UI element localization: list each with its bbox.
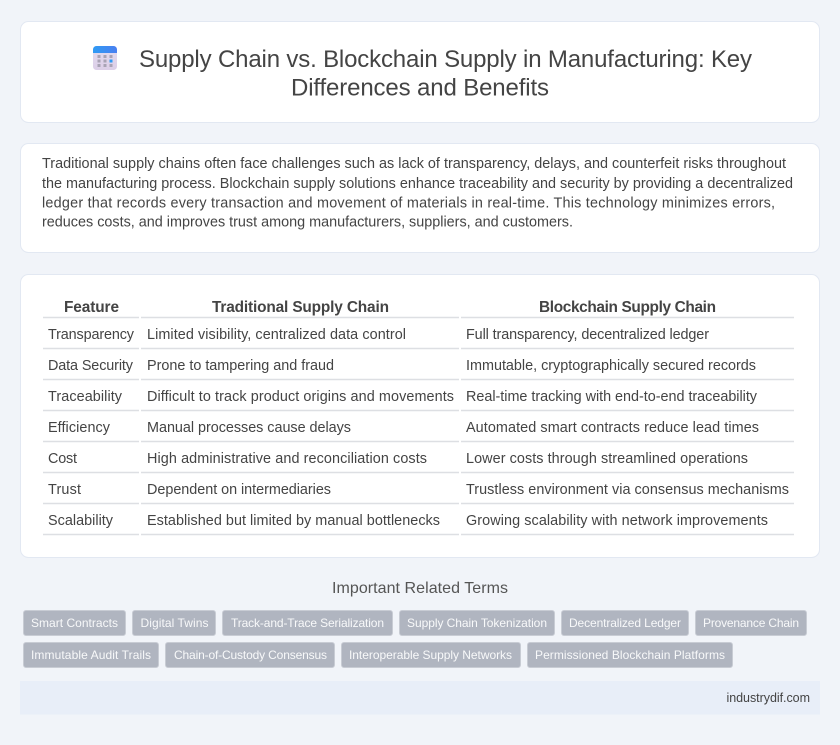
row: efficiency: Automated smart contracts reduce lead times bbox=[466, 420, 759, 436]
tag: Immutable Audit Trails bbox=[31, 648, 151, 662]
tag bbox=[132, 610, 216, 636]
row: traceability: Traceability bbox=[48, 389, 123, 405]
row: scalability: Established but limited by manual bottlenecks bbox=[147, 513, 440, 529]
row: cost: High administrative and reconciliation costs bbox=[147, 451, 427, 467]
tag: Digital Twins bbox=[140, 616, 208, 630]
row: trust: Trust bbox=[48, 482, 81, 498]
row: transparency: Transparency bbox=[48, 327, 135, 343]
tag bbox=[562, 610, 688, 636]
text block: introduction: Traditional supply chains often face challenges such as lack of transparency, delays, and counterfeit risks throughout bbox=[42, 156, 786, 172]
row: data security bbox=[48, 358, 756, 374]
tag: Supply Chain Tokenization bbox=[407, 616, 547, 630]
row: efficiency: Manual processes cause delays bbox=[147, 420, 351, 436]
footer bar bbox=[20, 681, 820, 714]
title bbox=[139, 46, 752, 102]
row: trust: Trustless environment via consensus mechanisms bbox=[466, 482, 789, 498]
row: efficiency bbox=[48, 420, 759, 436]
tag bbox=[24, 642, 158, 668]
row: cost: Lower costs through streamlined operations bbox=[466, 451, 748, 467]
text block: introduction bbox=[42, 156, 793, 230]
row: transparency: Limited visibility, centralized data control bbox=[147, 327, 406, 343]
row: cost bbox=[48, 451, 748, 467]
row: trust bbox=[48, 482, 789, 498]
row: scalability: Scalability bbox=[48, 513, 114, 529]
row: transparency: Full transparency, decentralized ledger bbox=[466, 327, 709, 343]
tag bbox=[222, 610, 392, 636]
tag bbox=[696, 610, 806, 636]
tag bbox=[24, 610, 126, 636]
row: traceability: Difficult to track product origins and movements bbox=[147, 389, 454, 405]
table header: Blockchain Supply Chain bbox=[539, 299, 716, 316]
row: scalability: Growing scalability with network improvements bbox=[466, 513, 768, 529]
row: data security: Immutable, cryptographically secured records bbox=[466, 358, 756, 374]
panel: header bbox=[20, 22, 820, 122]
tag bbox=[166, 642, 334, 668]
tags: related terms bbox=[24, 610, 806, 668]
tag bbox=[528, 642, 732, 668]
text block: introduction: the manufacturing process. Blockchain supply solutions enhance traceability and security by providing a decentralized bbox=[42, 176, 793, 192]
row: cost: Cost bbox=[48, 451, 77, 467]
table rules bbox=[43, 317, 794, 535]
text block: introduction: reduces costs, and improves trust among manufacturers, suppliers, and customers. bbox=[42, 214, 573, 230]
title: Supply Chain vs. Blockchain Supply in Manufacturing: Key bbox=[139, 46, 752, 73]
title: Differences and Benefits bbox=[291, 74, 549, 102]
tag bbox=[342, 642, 520, 668]
row: traceability: Real-time tracking with end-to-end traceability bbox=[466, 389, 758, 405]
tag: Smart Contracts bbox=[31, 616, 118, 630]
heading: related terms: Important Related Terms bbox=[332, 580, 508, 597]
table header bbox=[64, 299, 716, 316]
table header: Traditional Supply Chain bbox=[212, 299, 389, 316]
row: trust: Dependent on intermediaries bbox=[147, 482, 331, 498]
footer bar: industrydif.com bbox=[726, 691, 810, 705]
row: traceability bbox=[48, 389, 758, 405]
tag: Provenance Chain bbox=[703, 616, 799, 630]
tag: Interoperable Supply Networks bbox=[349, 648, 512, 662]
panel: comparison table bbox=[20, 274, 820, 558]
text block: introduction: ledger that records every transaction and movement of materials in real-time. This technology minimizes errors, bbox=[42, 196, 775, 212]
row: scalability bbox=[48, 513, 768, 529]
row: transparency bbox=[48, 327, 709, 343]
row: data security: Data Security bbox=[48, 358, 134, 374]
tag: Track-and-Trace Serialization bbox=[231, 616, 384, 630]
row: efficiency: Efficiency bbox=[48, 420, 111, 436]
icon: calendar bbox=[93, 46, 117, 70]
row: data security: Prone to tampering and fraud bbox=[147, 358, 334, 374]
tag: Decentralized Ledger bbox=[569, 616, 681, 630]
tag: Permissioned Blockchain Platforms bbox=[535, 648, 725, 662]
table header: Feature bbox=[64, 299, 119, 316]
tag: Chain-of-Custody Consensus bbox=[174, 648, 327, 662]
tag bbox=[400, 610, 554, 636]
panel: introduction text bbox=[20, 144, 820, 252]
